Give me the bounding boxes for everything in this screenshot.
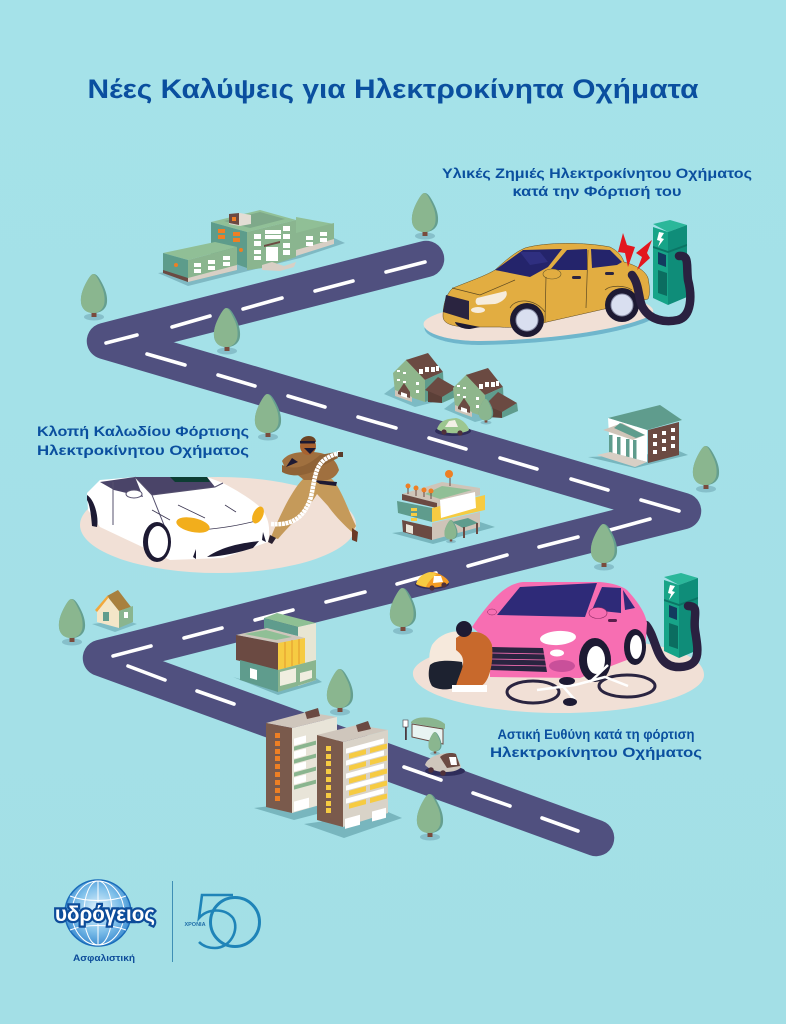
bicycle (507, 681, 559, 703)
logo: 50 years (184, 895, 260, 948)
tree (412, 193, 438, 240)
building: modern block (233, 613, 322, 695)
house (384, 353, 458, 407)
tree (327, 669, 353, 716)
thief (271, 479, 356, 539)
tree (591, 524, 617, 570)
car (443, 243, 650, 327)
tree (59, 599, 85, 646)
logo: Ydrogeios (55, 880, 155, 964)
car (87, 477, 269, 560)
road (101, 259, 683, 838)
stolen cable (271, 453, 340, 524)
tree (390, 588, 416, 634)
building: twin towers (254, 708, 402, 838)
caption: Υλικές Ζημιές Ηλεκτροκίνητου Οχήματος (442, 165, 752, 181)
caption: κατά την Φόρτισή του (512, 183, 682, 199)
car: green (435, 418, 471, 436)
tagline: Ασφαλιστική (73, 953, 135, 964)
sparks (618, 233, 635, 267)
platform (425, 300, 654, 345)
globe (65, 880, 131, 946)
caption: Αστική Ευθύνη κατά τη φόρτιση (498, 726, 694, 742)
charger (653, 220, 687, 305)
tree (693, 446, 719, 492)
cable (646, 606, 697, 667)
cable (632, 256, 690, 321)
building: shop (392, 470, 495, 544)
car: orange (415, 572, 449, 591)
tree (444, 520, 458, 543)
caption: Κλοπή Καλωδίου Φόρτισης (37, 423, 249, 439)
tree (428, 732, 442, 755)
panel: material damage while charging (424, 165, 752, 345)
tree (417, 794, 443, 840)
tree (479, 399, 493, 424)
divider (172, 881, 173, 962)
building: school (158, 210, 345, 286)
tree (214, 308, 240, 354)
car (472, 582, 647, 678)
tree (255, 394, 281, 440)
title: Νέες Καλύψεις για Ηλεκτροκίνητα Οχήματα (88, 74, 699, 104)
wordmark: υδρόγειος (55, 903, 155, 926)
house: small (92, 590, 137, 632)
house (444, 368, 518, 422)
bus stop (403, 717, 445, 744)
caption: Ηλεκτροκίνητου Οχήματος (37, 442, 249, 458)
panel: civil liability while charging (413, 573, 704, 760)
platform (413, 638, 704, 713)
logo: 50 years: ΧΡΟΝΙΑ (184, 922, 206, 928)
caption: Ηλεκτροκίνητου Οχήματος (490, 744, 702, 760)
building: columned hall (588, 405, 688, 468)
platform (80, 477, 356, 573)
person (429, 631, 462, 668)
charger (664, 573, 698, 658)
car: grey (425, 753, 465, 776)
panel: charging cable theft (37, 423, 358, 573)
tree (81, 274, 107, 320)
